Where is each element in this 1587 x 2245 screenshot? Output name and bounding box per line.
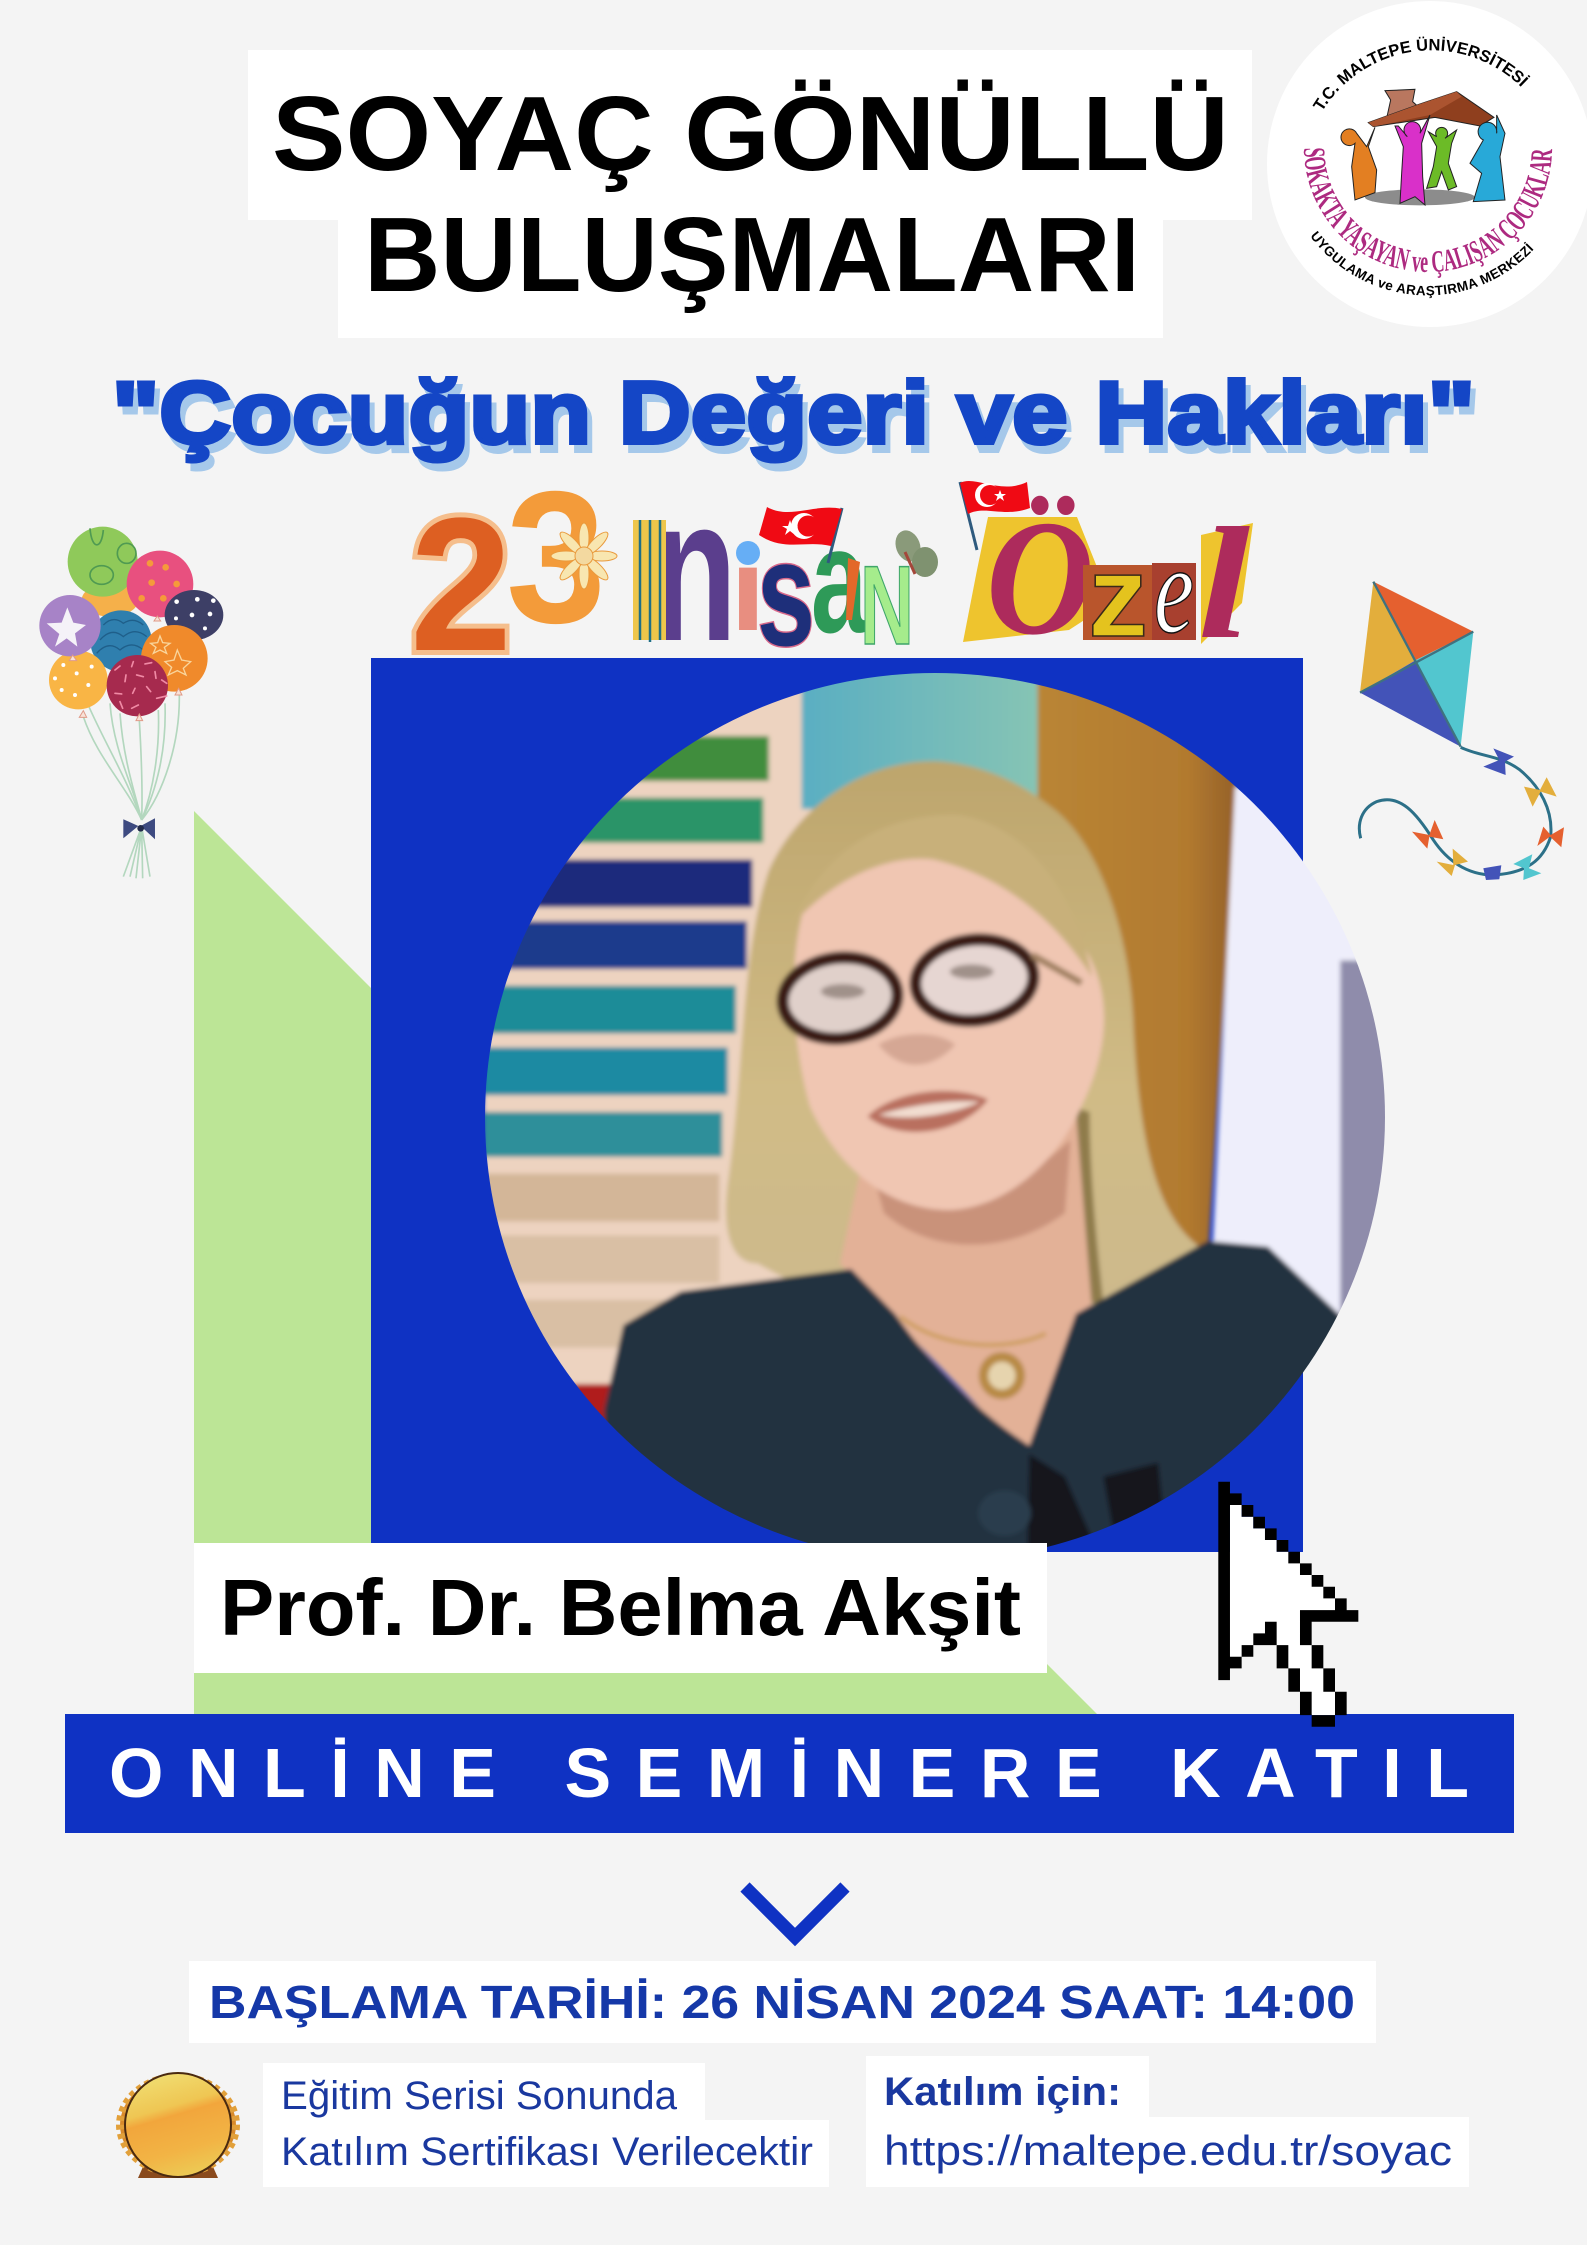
icon: kite	[1359, 582, 1564, 880]
word Nisan: N	[860, 543, 914, 668]
title	[248, 50, 1252, 338]
heading art: 23 Nisan Özel	[410, 452, 1253, 691]
photo: glasses	[779, 934, 1081, 1044]
participation link: Katılım için:	[884, 2070, 1121, 2114]
photo: hair	[726, 761, 1199, 1314]
number 23: 2	[410, 479, 512, 691]
date bar: BAŞLAMA TARİHİ: 26 NİSAN 2024 SAAT: 14:00	[209, 1976, 1355, 2028]
participation link	[866, 2056, 1469, 2187]
photo: background	[485, 673, 1385, 1422]
photo: neck and chest	[840, 1112, 1092, 1465]
word Nisan: n	[652, 455, 737, 684]
title: BULUŞMALARI	[364, 196, 1140, 314]
name plate: Prof. Dr. Belma Akşit	[220, 1563, 1021, 1652]
word Özel: e	[1154, 522, 1194, 660]
word Özel: l	[1198, 494, 1251, 672]
certificate note	[263, 2063, 829, 2187]
icon: chevron down	[745, 1887, 845, 1937]
certificate note: Eğitim Serisi Sonunda	[281, 2074, 678, 2118]
word Özel: Ö	[986, 486, 1094, 669]
green triangle backdrop	[194, 811, 1097, 1714]
icon: Turkish flag 1	[759, 507, 842, 563]
icon: pixel cursor	[1218, 1482, 1358, 1727]
photo: necklace	[900, 1317, 1046, 1345]
photo: face	[794, 840, 1104, 1210]
word Nisan	[633, 455, 914, 684]
title: SOYAÇ GÖNÜLLÜ	[272, 75, 1229, 193]
certificate note: Katılım Sertifikası Verilecektir	[281, 2130, 813, 2174]
subtitle: "Çocuğun Değeri ve Hakları"	[112, 363, 1475, 462]
word Nisan: s	[757, 509, 815, 677]
name plate	[194, 1543, 1047, 1673]
logo: university centre badge: T.C. MALTEPE ÜNİVERSİTESİ	[1312, 36, 1530, 109]
logo: university centre badge: UYGULAMA ve ARAŞTIRMA MERKEZİ	[1312, 230, 1534, 298]
number 23: 3	[506, 452, 606, 662]
participation link: https://maltepe.edu.tr/soyac	[884, 2127, 1452, 2174]
word Özel	[963, 486, 1253, 672]
word Nisan: a	[811, 496, 868, 664]
icon: Turkish flag 2	[960, 481, 1030, 550]
logo: university centre badge	[1267, 1, 1587, 327]
photo: jacket	[602, 1238, 1340, 1543]
logo: university centre badge: SOKAKTA YAŞAYAN ve ÇALIŞAN ÇOCUKLAR	[1304, 148, 1552, 278]
icon: gold medal	[120, 2073, 236, 2178]
icon: butterfly	[891, 527, 938, 577]
call to action banner: ONLİNE SEMİNERE KATIL	[109, 1734, 1469, 1812]
blue square panel	[371, 658, 1303, 1552]
icon: balloons	[39, 527, 223, 878]
call to action banner	[65, 1714, 1514, 1833]
date bar	[189, 1961, 1376, 2043]
word Nisan: i	[730, 524, 766, 656]
number 23	[410, 452, 617, 691]
portrait photo	[484, 663, 1401, 1589]
photo: nose and mouth	[878, 1034, 955, 1065]
word Özel: z	[1088, 533, 1148, 661]
